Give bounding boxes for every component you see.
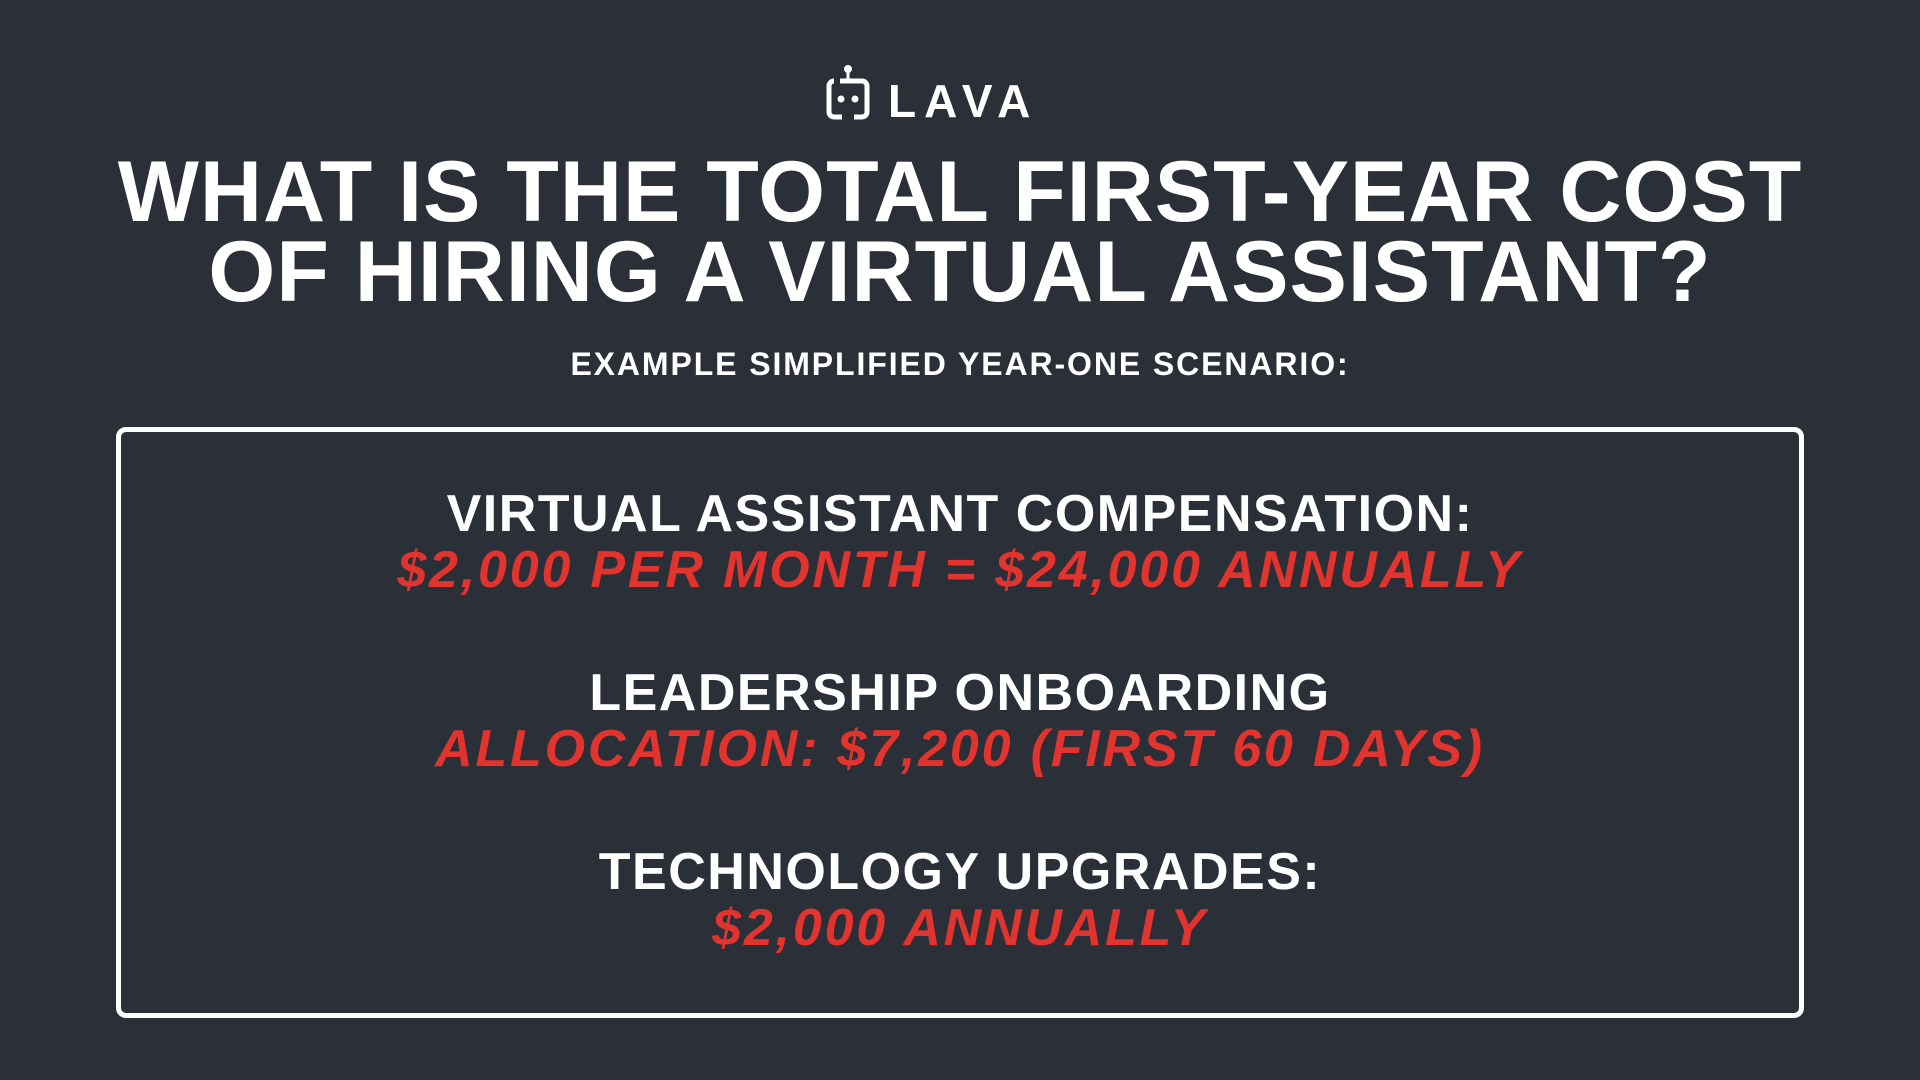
- item: onboarding: [434, 664, 1485, 778]
- item: technology: [599, 843, 1321, 957]
- item: compensation: VIRTUAL ASSISTANT COMPENSATION:: [447, 485, 1473, 543]
- item: onboarding: LEADERSHIP ONBOARDING: [589, 664, 1331, 722]
- title: [118, 144, 1802, 320]
- item: technology: TECHNOLOGY UPGRADES:: [599, 843, 1321, 901]
- item: compensation: [397, 485, 1524, 599]
- logo: [826, 65, 1038, 127]
- item: onboarding: ALLOCATION: $7,200 (FIRST 60 DAYS): [435, 720, 1485, 778]
- title: OF HIRING A VIRTUAL ASSISTANT?: [208, 224, 1712, 320]
- title: WHAT IS THE TOTAL FIRST-YEAR COST: [118, 144, 1802, 240]
- icon: robot: [826, 65, 870, 120]
- panel: cost breakdown: [116, 427, 1804, 1018]
- subtitle: EXAMPLE SIMPLIFIED YEAR-ONE SCENARIO:: [570, 346, 1350, 382]
- logo text: LAVA: [888, 75, 1038, 127]
- item: technology: $2,000 ANNUALLY: [712, 899, 1208, 957]
- item: compensation: $2,000 PER MONTH = $24,000 ANNUALLY: [397, 541, 1523, 599]
